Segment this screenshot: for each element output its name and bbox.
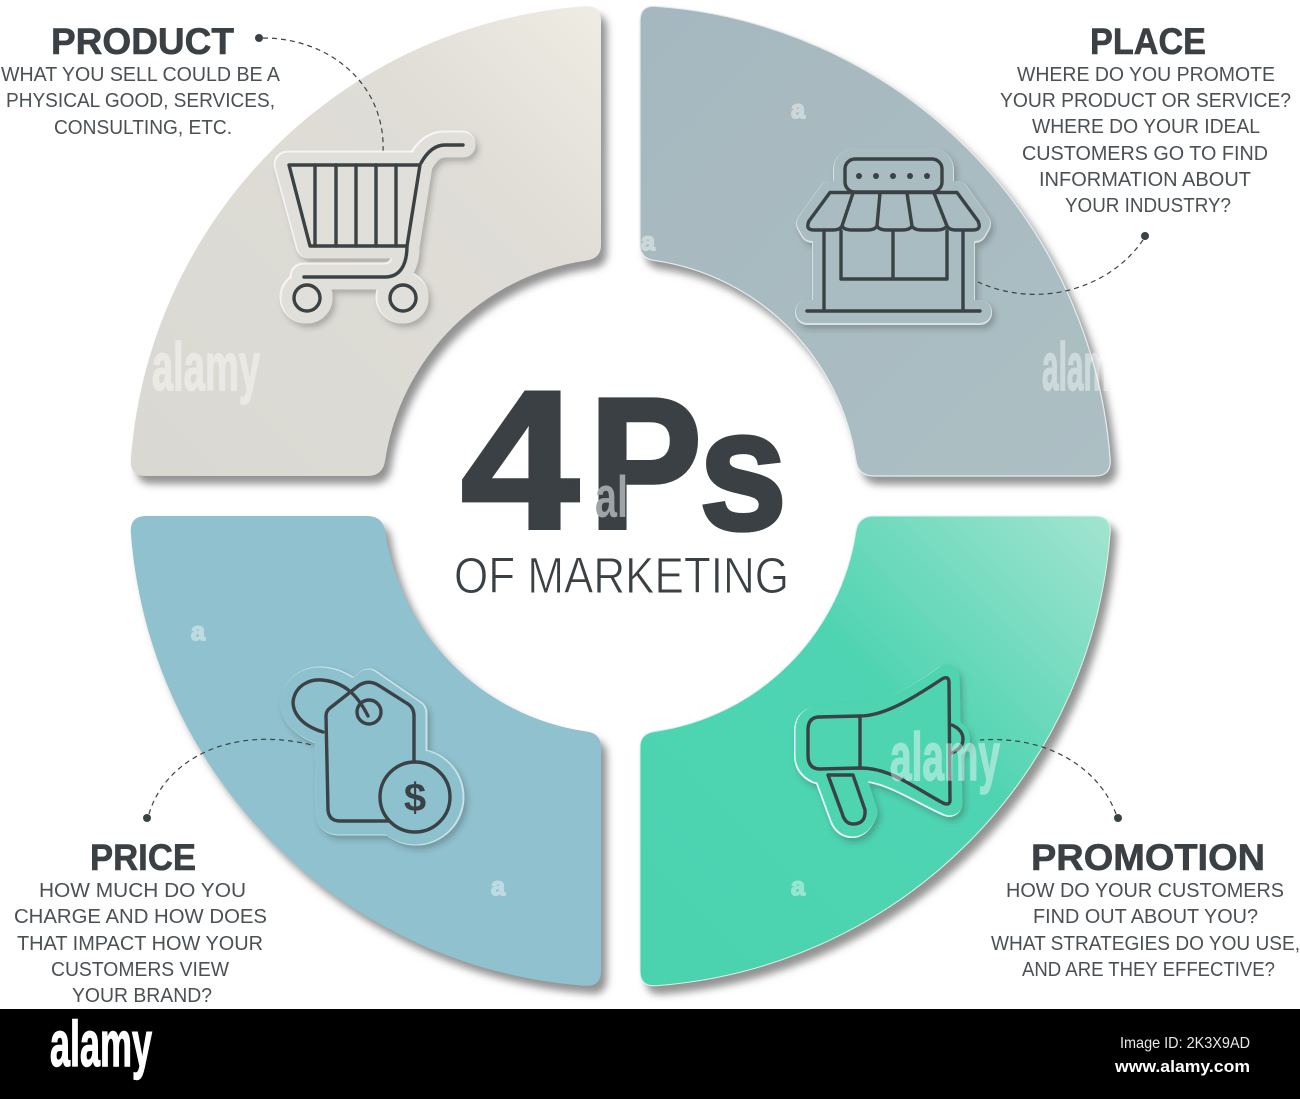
- icon: shopping cart: [287, 144, 463, 311]
- text block: product: PRODUCT: [51, 21, 234, 62]
- footer logo: alamy: [50, 1008, 152, 1080]
- watermark on title: al: [595, 465, 628, 530]
- text block: place: INFORMATION ABOUT: [1039, 169, 1251, 191]
- footer url: www.alamy.com: [1114, 1057, 1250, 1076]
- text block: price: THAT IMPACT HOW YOUR: [17, 933, 263, 955]
- icon: storefront: [807, 159, 980, 313]
- dashed connector: price: [143, 739, 312, 822]
- watermarks: a: [491, 871, 506, 901]
- title: 4Ps: P: [589, 359, 702, 568]
- dashed connector: promotion: [980, 740, 1122, 822]
- text block: promotion: HOW DO YOUR CUSTOMERS: [1006, 880, 1284, 902]
- text block: product: PHYSICAL GOOD, SERVICES,: [6, 90, 275, 112]
- watermarks: [152, 94, 1110, 901]
- title: 4Ps: [461, 350, 787, 570]
- text block: promotion: FIND OUT ABOUT YOU?: [1033, 906, 1258, 928]
- subtitle: of marketing: OF MARKETING: [454, 547, 789, 604]
- panel: place quadrant: [640, 6, 1110, 476]
- text block: place: CUSTOMERS GO TO FIND: [1022, 143, 1268, 165]
- watermarks: a: [791, 94, 806, 124]
- dollar sign: $: [404, 776, 426, 820]
- dashed connector: product: [255, 34, 383, 152]
- text block: place: YOUR PRODUCT OR SERVICE?: [1000, 90, 1291, 112]
- text block: place: YOUR INDUSTRY?: [1065, 195, 1231, 217]
- dashed connector: place: [978, 232, 1149, 294]
- footer bar: [0, 1008, 1300, 1099]
- text block: promotion: [991, 837, 1300, 981]
- panel: product quadrant: [131, 6, 601, 476]
- text block: price: PRICE: [90, 837, 196, 878]
- title: 4Ps: 4: [461, 350, 579, 570]
- title: 4Ps: s: [699, 374, 787, 566]
- text block: product: CONSULTING, ETC.: [54, 117, 232, 139]
- text block: price: CUSTOMERS VIEW: [51, 959, 229, 981]
- text block: price: YOUR BRAND?: [72, 985, 212, 1007]
- text block: promotion: AND ARE THEY EFFECTIVE?: [1022, 959, 1275, 981]
- text block: price: [14, 837, 267, 1007]
- watermarks: a: [791, 871, 806, 901]
- watermarks: alamy: [890, 719, 1000, 795]
- text block: price: HOW MUCH DO YOU: [39, 880, 246, 902]
- text block: place: WHERE DO YOUR IDEAL: [1032, 116, 1260, 138]
- text block: promotion: PROMOTION: [1031, 837, 1265, 878]
- footer image id: Image ID: 2K3X9AD: [1120, 1035, 1250, 1052]
- text block: place: WHERE DO YOU PROMOTE: [1017, 64, 1275, 86]
- text block: product: [1, 21, 281, 139]
- text block: place: PLACE: [1090, 21, 1206, 62]
- panel: promotion quadrant: [640, 516, 1110, 986]
- text block: product: WHAT YOU SELL COULD BE A: [1, 64, 281, 86]
- watermarks: a: [641, 226, 656, 256]
- text block: place: [1000, 21, 1291, 217]
- watermarks: alamy: [152, 329, 260, 405]
- text block: price: CHARGE AND HOW DOES: [14, 906, 267, 928]
- icon: price tag: [293, 680, 451, 832]
- icon: megaphone: [807, 677, 964, 825]
- watermarks: a: [191, 616, 206, 646]
- text: alam: [1042, 329, 1110, 405]
- panel: price quadrant: [131, 516, 601, 986]
